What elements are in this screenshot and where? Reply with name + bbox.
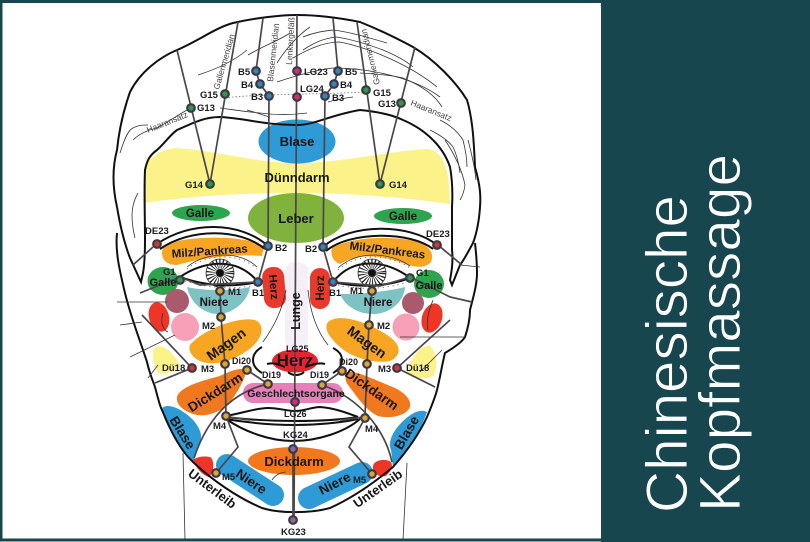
point labels: G1 <box>416 268 429 279</box>
zone labels: Blase <box>280 134 314 149</box>
point group blue <box>252 67 342 286</box>
acupressure points <box>153 67 441 524</box>
zone: Blase jaw right <box>390 411 427 467</box>
hairline dotted marker <box>225 92 366 98</box>
zone: Herz right <box>310 268 330 309</box>
zone labels: Niere <box>233 466 270 498</box>
point labels: Dü18 <box>406 363 429 374</box>
meridian name labels: Haaransatz <box>409 98 453 123</box>
point labels: G1 <box>163 267 176 278</box>
zone labels: Dickdarm <box>264 454 324 469</box>
point labels: LG25 <box>286 344 309 354</box>
zone: rose cheek right <box>402 292 424 314</box>
zone: rose cheek left <box>165 289 189 313</box>
zone: pink cheek right <box>392 314 420 340</box>
point labels: B2 <box>305 244 317 255</box>
cheek contour lines <box>117 265 480 540</box>
head outline and facial drawing <box>114 15 480 540</box>
nose wings <box>253 347 342 375</box>
point labels: M4 <box>365 424 379 435</box>
point group red <box>153 240 441 372</box>
side panel <box>601 0 810 542</box>
point labels: M1 <box>350 286 364 297</box>
point labels: G14 <box>389 180 408 191</box>
zone: Galle eye right <box>414 270 444 298</box>
zone labels: Unterleib <box>185 466 239 512</box>
point labels: DE23 <box>426 229 450 240</box>
zone: Milz/Pankreas left <box>162 238 264 265</box>
zone labels: Dickdarm <box>342 366 401 413</box>
point labels: B4 <box>241 80 254 91</box>
zone: Niere jaw left <box>227 465 273 495</box>
side panel title <box>635 154 753 513</box>
zone: Niere right <box>340 287 405 314</box>
left temple wedge <box>117 207 145 282</box>
point labels: G15 <box>373 88 392 99</box>
zone: red cheek right <box>418 301 446 335</box>
zone: Dickdarm cheek right <box>345 372 410 417</box>
point labels: Di19 <box>310 370 329 380</box>
meridian name labels: Gallenmeridian <box>358 28 382 86</box>
zone: Leber <box>248 193 344 243</box>
point labels: M5 <box>222 472 236 483</box>
zone labels: Magen <box>203 324 249 364</box>
point labels: LG23 <box>304 67 328 78</box>
zone: yellow Dü18 right <box>407 346 436 378</box>
zone: Galle eye left <box>148 267 178 295</box>
right brow arcs <box>323 229 437 247</box>
zone: pink cheek left <box>171 313 199 341</box>
point labels: Di20 <box>232 356 251 366</box>
zone labels: Lunge <box>289 292 303 330</box>
zone: Blase forehead <box>258 120 336 164</box>
zone labels: Galle <box>186 208 214 220</box>
zone: Blase jaw left <box>161 406 201 462</box>
zone labels: Herz <box>315 275 327 300</box>
zone: Niere left <box>187 287 250 314</box>
point labels: M3 <box>378 364 391 375</box>
point labels: G13 <box>378 99 396 110</box>
zone labels: Milz/Pankreas <box>349 240 426 262</box>
point labels: Di20 <box>339 357 358 367</box>
point labels: M3 <box>201 364 214 375</box>
zone labels: Geschlechtsorgane <box>247 388 345 400</box>
point labels <box>145 67 450 538</box>
point labels: B3 <box>251 92 263 103</box>
zone: forehead Dünndarm yellow <box>145 148 450 204</box>
zone labels: Galle <box>416 280 442 292</box>
zone: Magen left <box>189 319 262 363</box>
zone: Magen right <box>326 318 399 362</box>
zone: Lunge pale strip <box>285 262 308 350</box>
side panel title: Chinesische <box>635 195 700 513</box>
point labels: DE23 <box>145 226 169 237</box>
zone: Geschlechtsorgane <box>243 383 343 403</box>
meridian name labels <box>145 17 453 135</box>
point labels: Di19 <box>262 370 281 380</box>
jaw outline <box>117 233 477 512</box>
point labels: G14 <box>185 180 204 191</box>
zone labels: Blase <box>391 413 422 452</box>
head outline upper <box>114 15 480 285</box>
zone labels: Magen <box>344 322 390 362</box>
zone labels: Niere <box>316 469 354 498</box>
zone: Milz/Pankreas right <box>331 238 432 267</box>
zone: red cheek left <box>145 300 173 334</box>
hairline <box>145 110 433 240</box>
zone labels: Galle <box>389 211 417 223</box>
left eye <box>180 255 258 288</box>
Niere leader <box>272 472 286 480</box>
side panel title: Kopfmassage <box>688 154 753 512</box>
point labels: B1 <box>252 288 265 299</box>
zone labels: Leber <box>278 211 314 226</box>
zone labels: Unterleib <box>350 466 405 511</box>
point labels: M1 <box>228 287 242 298</box>
point labels: LG24 <box>300 84 324 95</box>
left brow arcs <box>157 227 268 246</box>
zone: red jaw right <box>373 460 392 476</box>
point labels: B2 <box>275 243 287 254</box>
point labels: LG26 <box>284 409 307 419</box>
point labels: M2 <box>202 321 215 332</box>
zone: Dickdarm cheek left <box>177 369 246 415</box>
zone labels: Dickdarm <box>185 370 245 415</box>
zone: Dickdarm chin <box>248 447 340 475</box>
right eye <box>333 255 410 288</box>
zone labels: Niere <box>364 297 392 309</box>
zone: Herz left <box>261 266 287 309</box>
point labels: B3 <box>332 93 344 104</box>
point labels: Dü18 <box>162 363 185 374</box>
zone labels: Herz <box>277 351 313 370</box>
lips <box>225 407 360 441</box>
hair strands <box>120 27 476 238</box>
point group green <box>176 86 414 284</box>
meridian name labels: Lenkergefäß <box>284 17 296 65</box>
zone labels: Herz <box>266 274 280 300</box>
point labels: B5 <box>345 67 358 78</box>
zone labels: Blase <box>167 413 199 452</box>
meridian lines <box>133 15 472 520</box>
zone labels: Galle <box>150 277 176 289</box>
point group magenta <box>291 67 301 406</box>
point labels: G15 <box>200 90 219 101</box>
point labels: M4 <box>213 421 227 432</box>
zone: yellow Dü18 left <box>153 346 180 374</box>
point labels: KG23 <box>281 527 306 538</box>
point labels: B5 <box>238 67 251 78</box>
meridian name labels: Blasenmeridian <box>265 23 281 82</box>
zone: Niere jaw right <box>309 473 362 498</box>
point group purple <box>289 445 297 524</box>
face colour zones <box>145 120 450 498</box>
point labels: KG24 <box>283 430 309 441</box>
zone labels: Niere <box>200 297 228 309</box>
point labels: M2 <box>377 321 390 332</box>
zone labels <box>150 134 442 512</box>
zone labels: Dünndarm <box>264 170 330 185</box>
zone labels: Milz/Pankreas <box>171 243 248 261</box>
meridian name labels: Haaransatz <box>145 109 189 135</box>
zone: Galle right <box>374 208 432 224</box>
zone: Herz centre <box>272 350 318 372</box>
zone: red jaw left <box>193 456 213 477</box>
point group amber <box>212 287 376 478</box>
point labels: G13 <box>197 103 215 114</box>
meridian name labels: Gallenmeridian <box>211 33 237 91</box>
point labels: B1 <box>329 288 342 299</box>
zone: Galle left <box>172 205 230 221</box>
point labels: B4 <box>340 80 353 91</box>
point labels: M5 <box>353 475 367 486</box>
